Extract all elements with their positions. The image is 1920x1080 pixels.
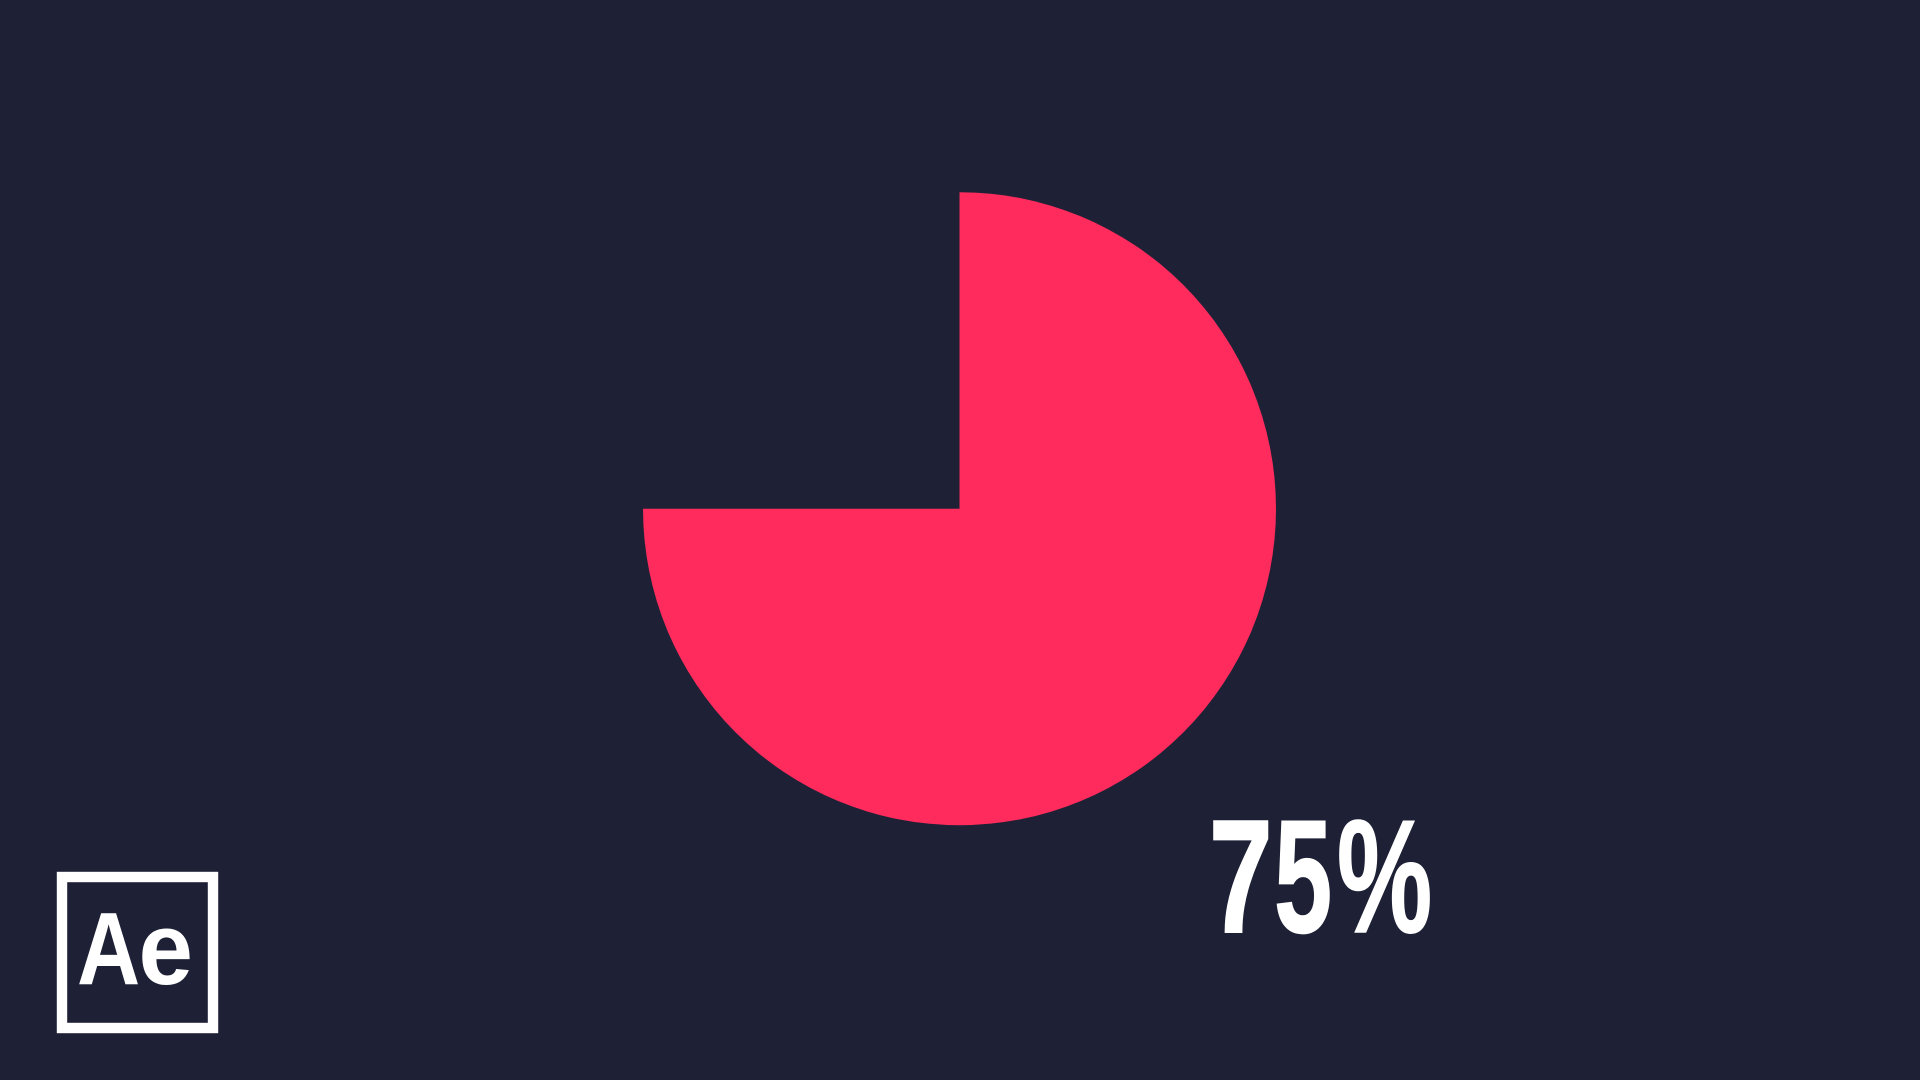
percentage label: 75%: 7 xyxy=(1209,787,1273,967)
percentage label: 75%: % xyxy=(1337,786,1432,966)
logo frame xyxy=(62,877,213,1028)
logo letters: Ae: A xyxy=(77,891,140,1007)
After Effects logo xyxy=(62,877,213,1028)
percentage label: 75%: 5 xyxy=(1274,786,1332,966)
percentage label: 75% xyxy=(1209,786,1432,967)
After Effects logo: e xyxy=(138,892,193,1007)
pie chart: 75% sector xyxy=(643,192,1276,825)
